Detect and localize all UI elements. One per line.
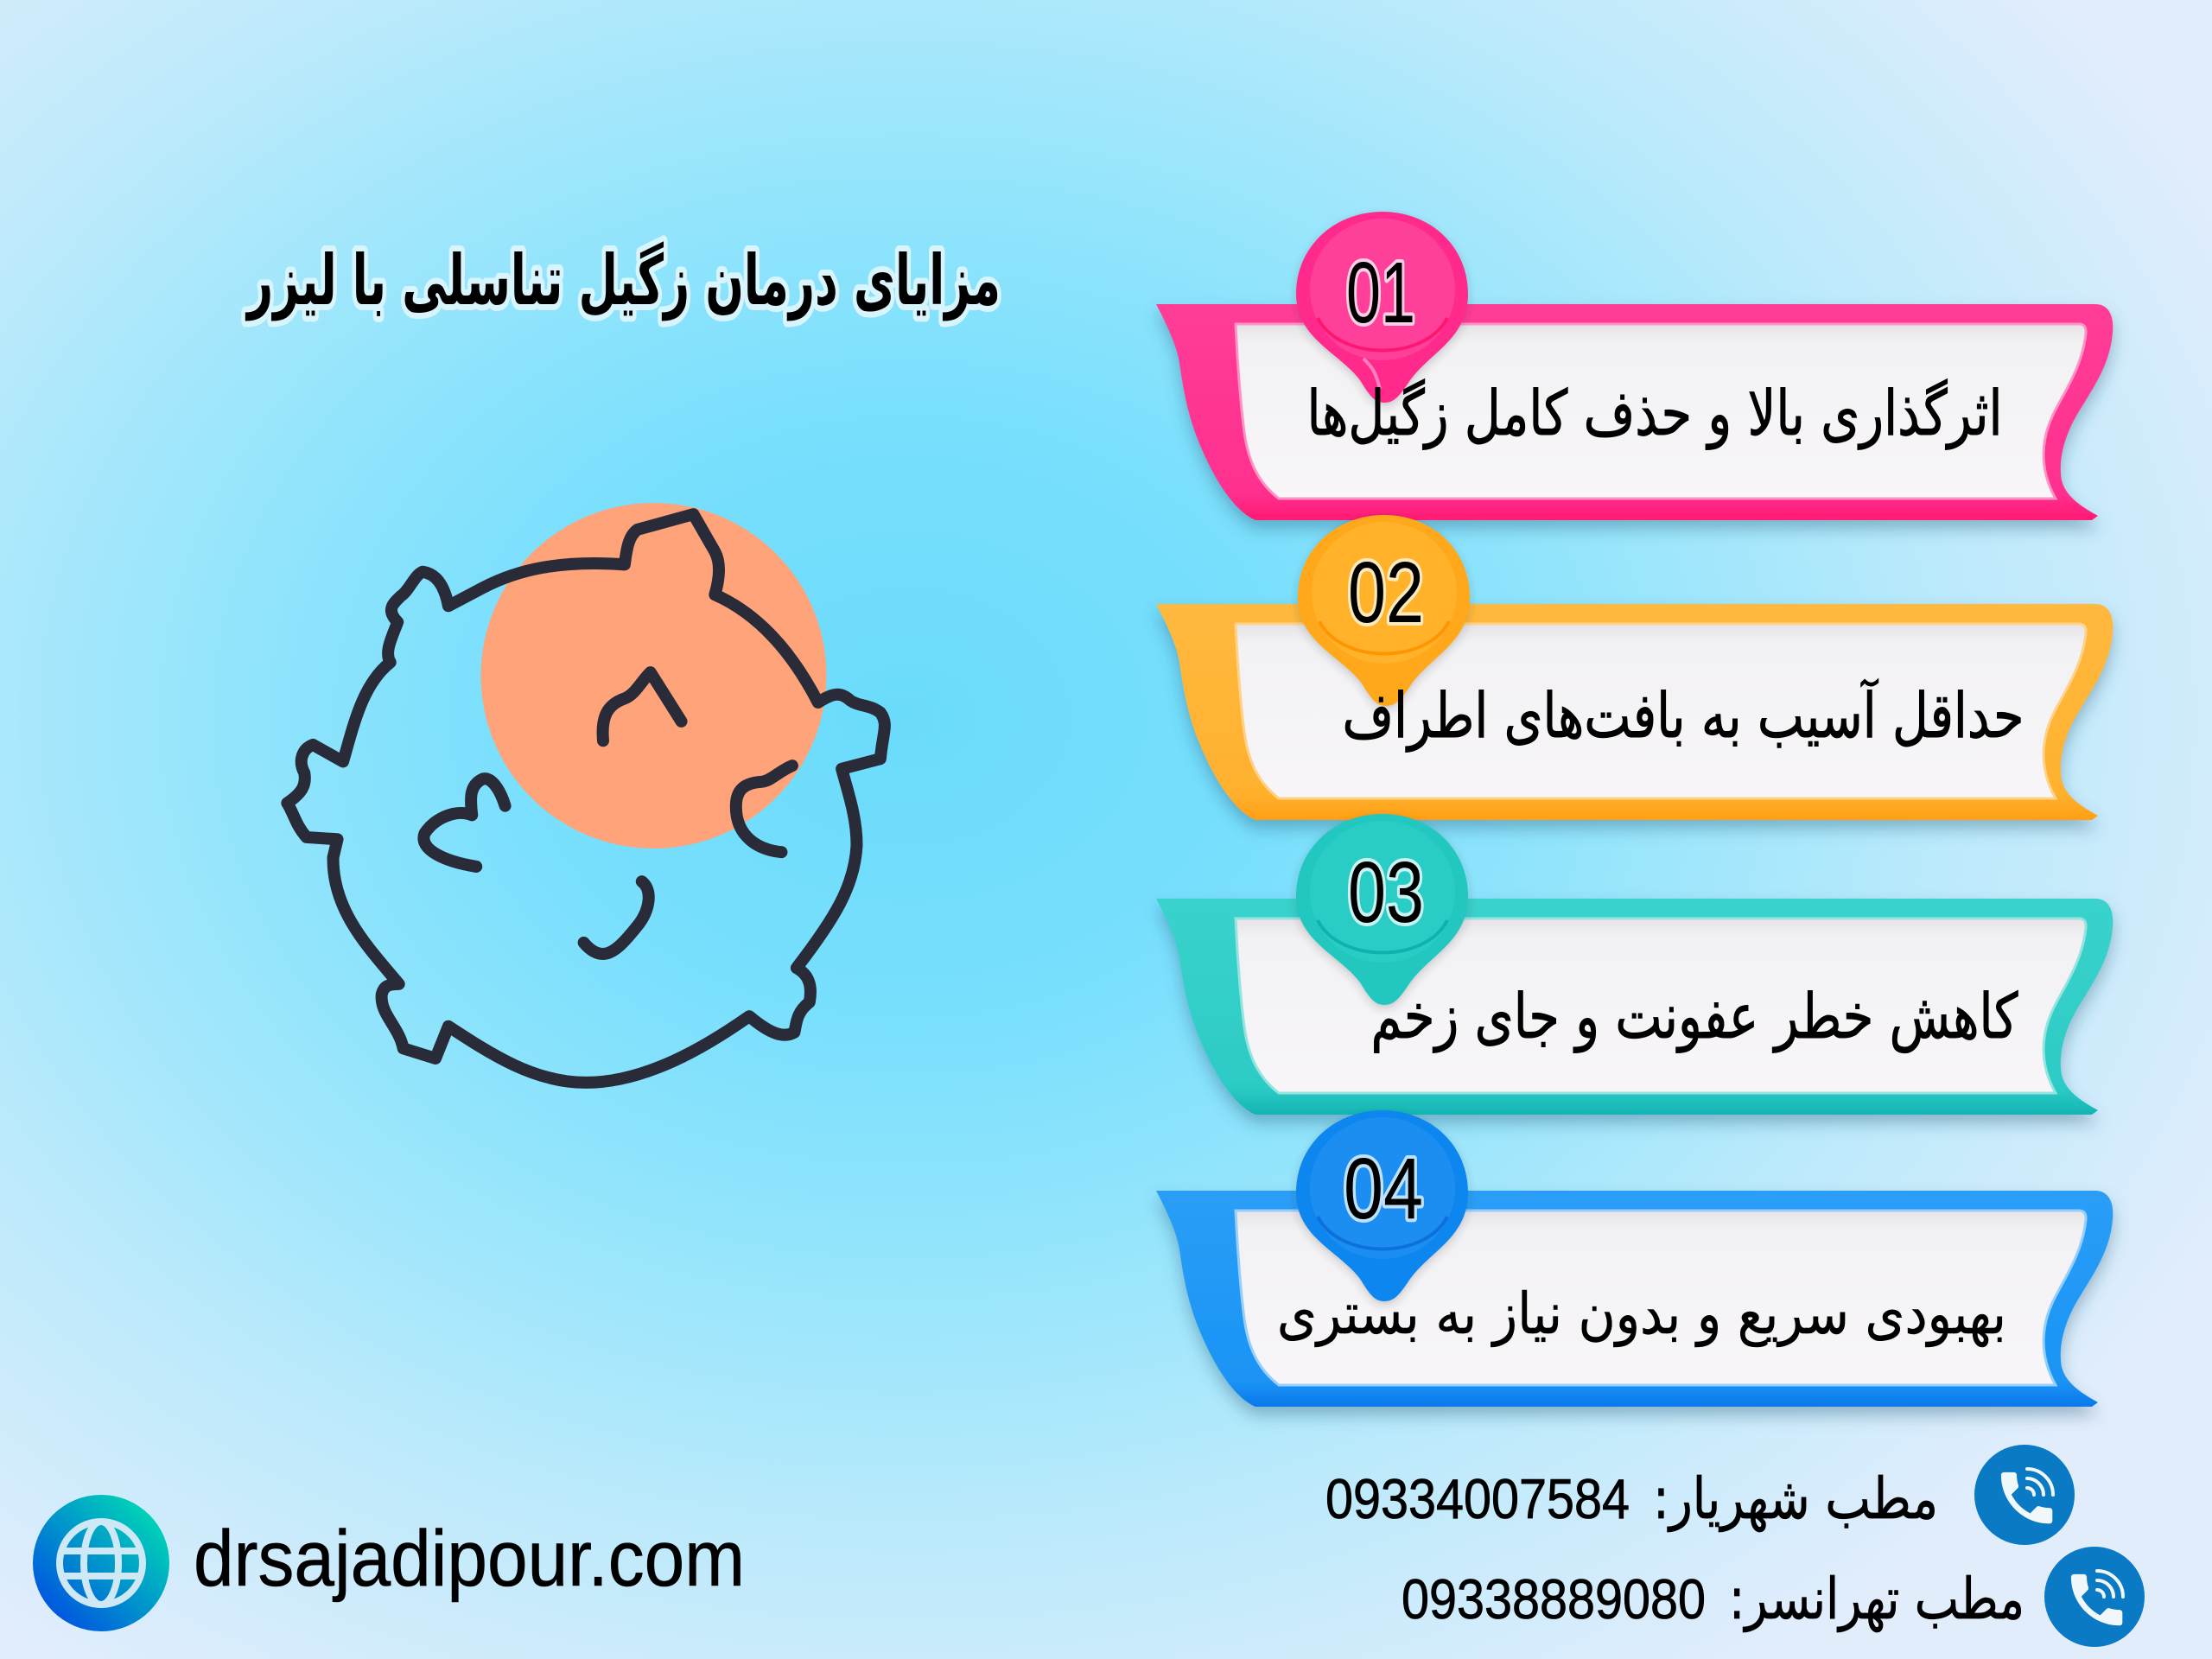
contact: Tehransar clinic — [1402, 1547, 2145, 1647]
panel text 02: حداقل آسیب به بافت‌های اطراف — [1343, 678, 2024, 753]
card — [1236, 324, 2086, 499]
icon: phone — [2044, 1547, 2145, 1647]
label: مطب شهریار: — [1653, 1465, 1938, 1532]
frame — [1156, 304, 2113, 520]
phone number: 09334007584 — [1325, 1467, 1630, 1530]
panel 02 (orange) — [1156, 515, 2113, 820]
panel text 01: اثرگذاری بالا و حذف کامل زگیل‌ها — [1306, 377, 2003, 450]
number: 02 — [1348, 544, 1424, 641]
icon: phone — [1974, 1445, 2075, 1545]
pin — [1296, 814, 1468, 1005]
website address: drsajadipour.com — [194, 1515, 745, 1603]
pin — [1298, 515, 1470, 706]
title: مزایای درمان زگیل تناسلی با لیزر — [245, 240, 1001, 321]
panel 03 (teal) — [1156, 814, 2113, 1115]
orange circle — [480, 503, 826, 849]
frame — [1156, 604, 2113, 820]
number: 04 — [1344, 1141, 1423, 1237]
panel text 03: کاهش خطر عفونت و جای زخم — [1370, 980, 2018, 1053]
frame — [1156, 1191, 2113, 1407]
pin — [1296, 1110, 1468, 1301]
illustration: wart outline over orange circle — [287, 503, 885, 1083]
phone number: 09338889080 — [1402, 1567, 1706, 1630]
card — [1236, 624, 2086, 798]
card — [1236, 918, 2086, 1093]
contact: Shahriar clinic — [1325, 1445, 2075, 1545]
wart outline — [287, 514, 885, 1083]
panel 04 (blue) — [1156, 1110, 2113, 1407]
card — [1236, 1211, 2086, 1385]
icon: globe — [33, 1495, 169, 1631]
number: 03 — [1348, 844, 1424, 941]
number: 01 — [1346, 245, 1415, 341]
website — [33, 1495, 745, 1631]
label: مطب تهرانسر: — [1729, 1566, 2024, 1632]
frame — [1156, 899, 2113, 1115]
pin — [1296, 212, 1468, 403]
panel text 04: بهبودی سریع و بدون نیاز به بستری — [1277, 1281, 2006, 1347]
panel 01 (pink) — [1156, 212, 2113, 520]
